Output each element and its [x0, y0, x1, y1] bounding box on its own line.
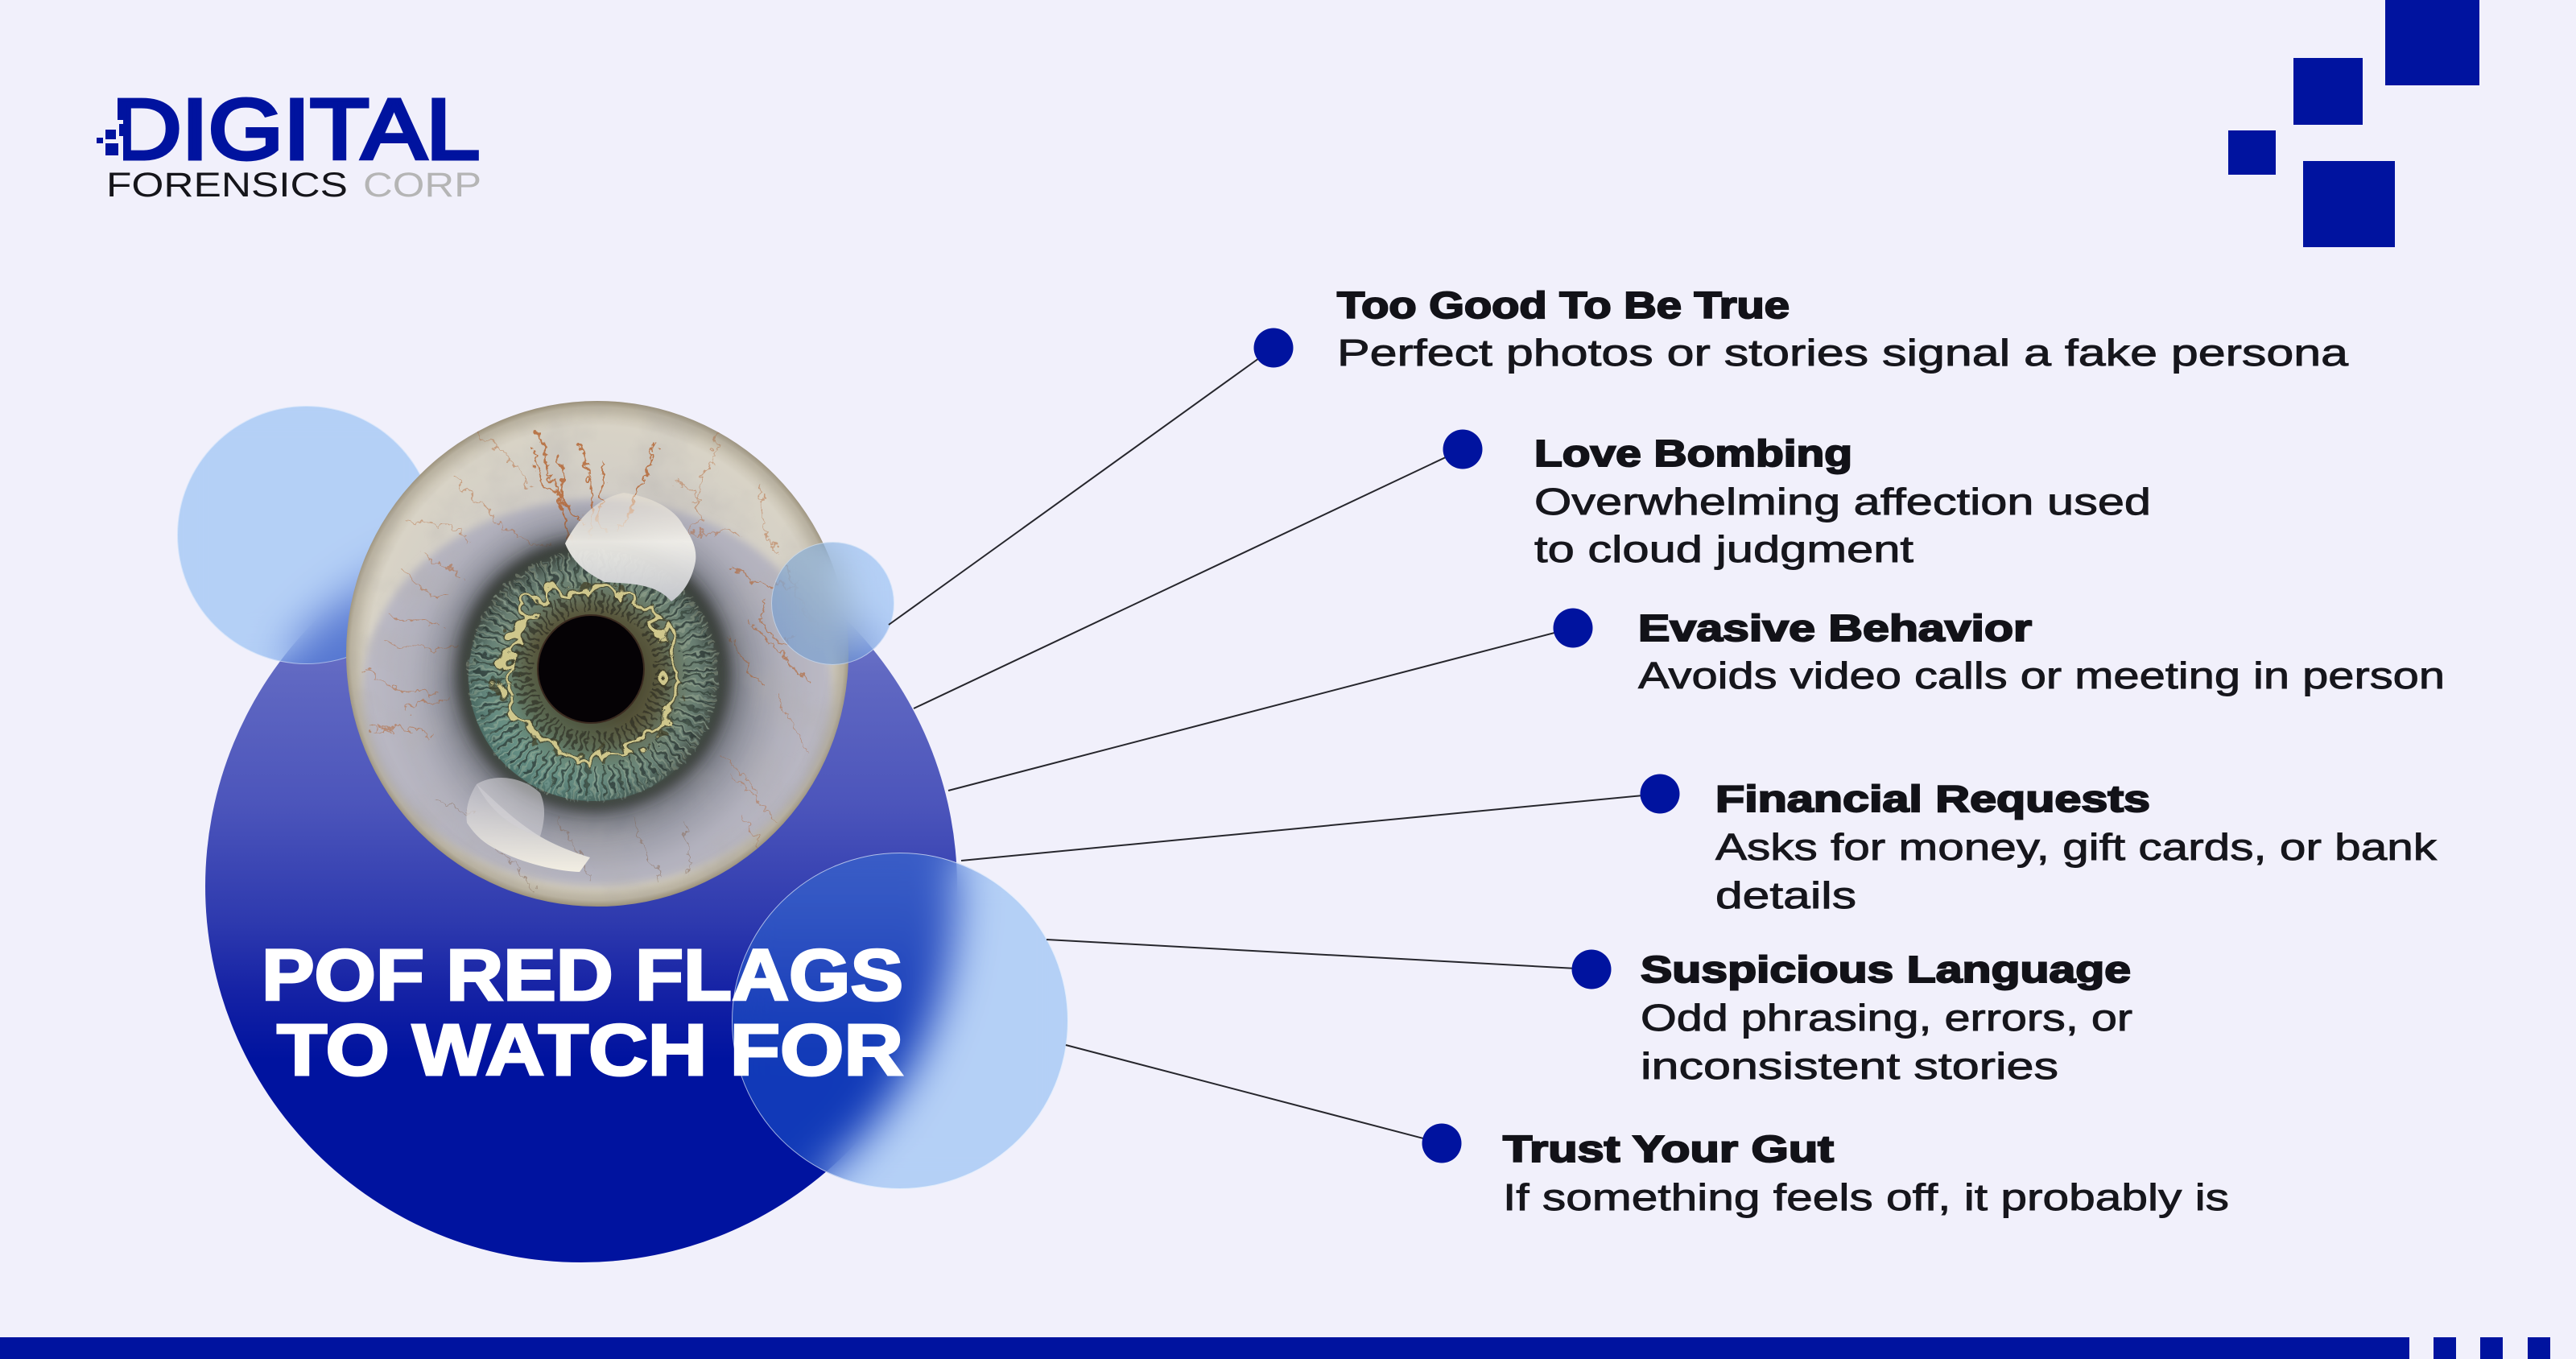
heading: Evasive Behavior: [1638, 607, 2032, 649]
item: Trust Your Gut: [1422, 1124, 2229, 1218]
item: Financial Requests: [1641, 775, 2438, 916]
description: Avoids video calls or meeting in person: [1638, 655, 2445, 696]
rim shading: [349, 406, 845, 902]
illustration: eyeball: [346, 401, 866, 907]
blood veins: [349, 406, 845, 902]
description: details: [1715, 874, 1856, 916]
connector lines: [889, 348, 1660, 1143]
glass circle: small right: [771, 542, 894, 665]
item: Suspicious Language: [1571, 948, 2132, 1087]
item: Love Bombing: [1443, 430, 2151, 570]
heading: Trust Your Gut: [1503, 1128, 1834, 1170]
description: inconsistent stories: [1641, 1045, 2058, 1087]
title: POF RED FLAGS: [262, 936, 903, 1016]
marker dot: [1422, 1124, 1462, 1163]
footer bar: [0, 1337, 2550, 1359]
description: Asks for money, gift cards, or bank: [1715, 826, 2438, 868]
pupil: [538, 615, 644, 723]
item: Too Good To Be True: [1254, 284, 2349, 374]
marker dot: [1641, 775, 1679, 813]
logo: Digital Forensics Corp: FORENSICS: [106, 166, 348, 204]
highlight: top: [565, 493, 696, 601]
description: [1641, 997, 2132, 1087]
title: TO WATCH FOR: [277, 1010, 903, 1091]
glass circle: upper left: [177, 406, 436, 664]
iris: [458, 539, 729, 810]
description: If something feels off, it probably is: [1503, 1176, 2229, 1218]
heading: Too Good To Be True: [1337, 284, 1790, 326]
title: [262, 936, 903, 1091]
description: Odd phrasing, errors, or: [1641, 997, 2132, 1039]
description: Perfect photos or stories signal a fake persona: [1337, 332, 2349, 374]
heading: Love Bombing: [1534, 432, 1852, 474]
inner lavender disc: [362, 499, 832, 886]
glass circle: lower right: [732, 853, 1068, 1189]
item: Evasive Behavior: [1554, 607, 2445, 696]
marker dot: [1554, 609, 1592, 647]
marble texture: [346, 401, 848, 907]
heading: Financial Requests: [1715, 778, 2150, 820]
description: to cloud judgment: [1534, 528, 1913, 570]
iris shadow: [447, 530, 740, 823]
highlight: bottom: [467, 784, 590, 872]
logo: Digital Forensics Corp: DIGITAL: [112, 82, 480, 177]
marker dot: [1443, 430, 1483, 469]
marker dot: [1571, 950, 1612, 989]
logo: Digital Forensics Corp: CORP: [363, 166, 481, 204]
marker dot: [1254, 328, 1293, 367]
heading: Suspicious Language: [1641, 948, 2131, 990]
decorative squares: top right: [2228, 0, 2479, 247]
description: [1534, 481, 2151, 570]
sclera: [346, 401, 848, 907]
description: [1715, 826, 2438, 916]
logo: Digital Forensics Corp: [97, 82, 481, 204]
description: Overwhelming affection used: [1534, 481, 2151, 523]
